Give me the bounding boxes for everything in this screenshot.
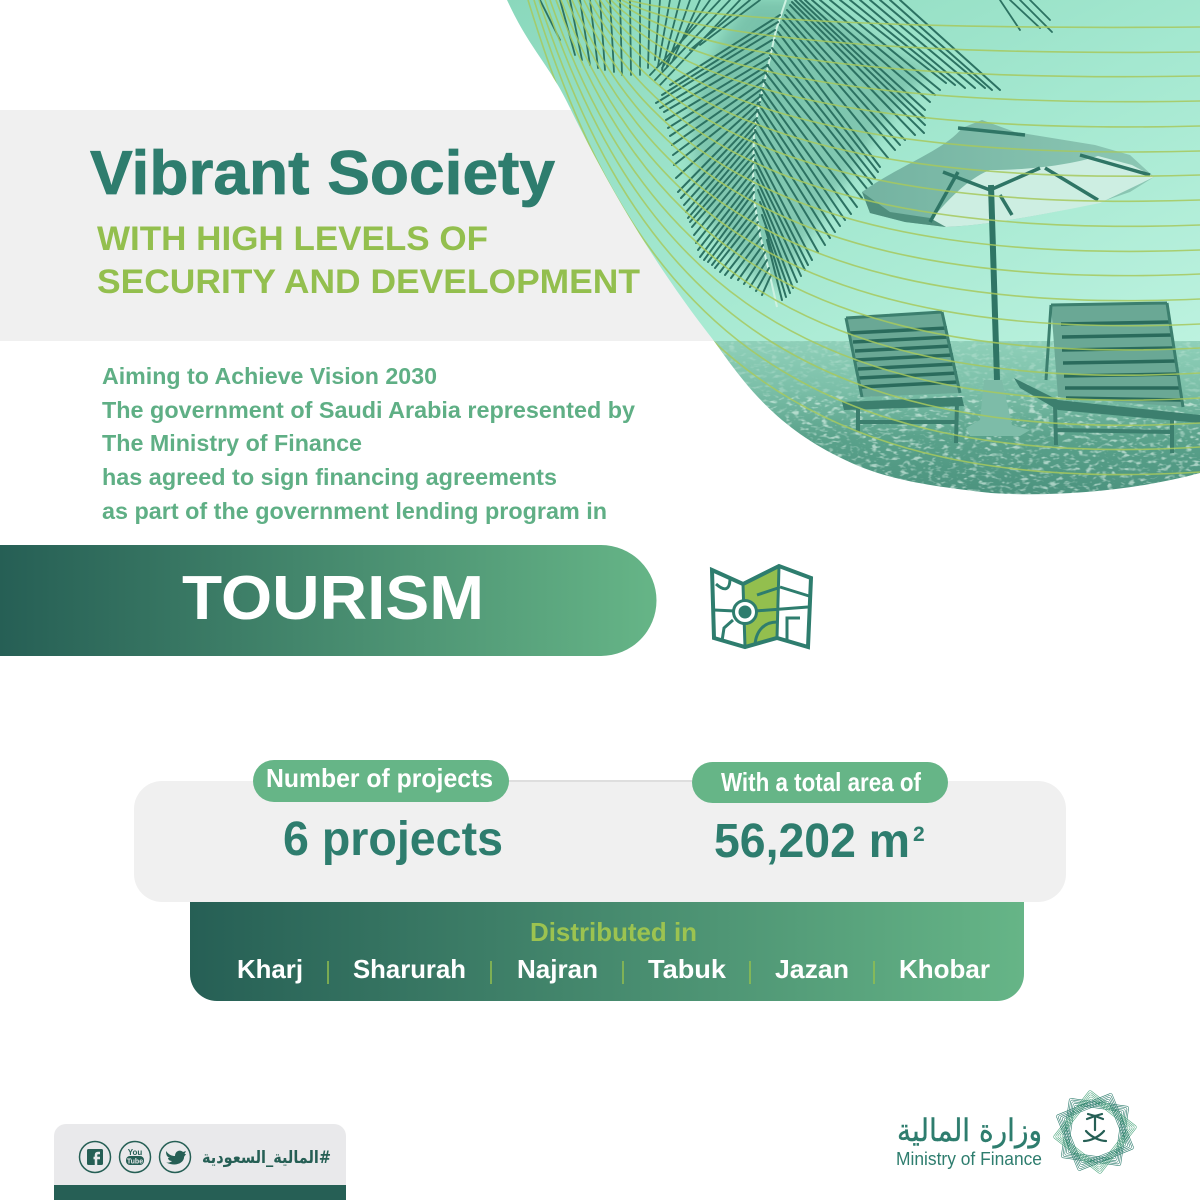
city list: Jazan [775, 954, 849, 984]
heading: distributed in: Distributed in [530, 917, 697, 947]
icon: youtube: You [128, 1148, 142, 1157]
pill: number of projects [253, 760, 509, 802]
icon: folded map [712, 566, 811, 647]
intro text block: The Ministry of Finance [102, 430, 362, 456]
subtitle [97, 220, 640, 301]
panel: statistics [134, 760, 1066, 902]
logo emblem [1053, 1090, 1137, 1174]
intro text block: The government of Saudi Arabia represented by [102, 397, 635, 423]
city list [237, 954, 990, 984]
icon: youtube [120, 1142, 150, 1172]
panel: social media footer [54, 1124, 346, 1200]
sky [500, 0, 1200, 342]
logo: ministry of finance [896, 1090, 1137, 1174]
sector banner: tourism: TOURISM [182, 564, 484, 633]
hashtag: #المالية_السعودية [202, 1148, 331, 1168]
city list: Tabuk [648, 954, 727, 984]
left beach chair [842, 312, 964, 443]
pill: total area: With a total area of [721, 767, 921, 797]
palm fronds [540, 0, 1052, 307]
city list: Najran [517, 954, 598, 984]
city list: Sharurah [353, 954, 466, 984]
intro text block: has agreed to sign financing agreements [102, 464, 557, 490]
stat: projects: 6 projects [283, 813, 503, 866]
right beach chair [1014, 303, 1200, 453]
city list: Kharj [237, 954, 303, 984]
city list: Khobar [899, 954, 990, 984]
curved lime lines [528, 0, 1200, 475]
panel: title background [0, 110, 730, 341]
stat: area: 56,202 m [714, 815, 910, 868]
subtitle: WITH HIGH LEVELS OF [97, 220, 488, 258]
icon: facebook [80, 1142, 110, 1172]
sector banner: tourism [0, 545, 656, 656]
icon: youtube: Tube [127, 1158, 143, 1166]
photo: beach with palm, umbrella and chairs [500, 0, 1200, 501]
pill: total area [692, 762, 948, 803]
stat: area: 2 [913, 823, 925, 846]
panel: distribution of cities [190, 902, 1024, 1001]
logo english name: Ministry of Finance [896, 1149, 1042, 1169]
beach umbrella [862, 120, 1154, 436]
pill: number of projects: Number of projects [266, 763, 493, 793]
intro text block [102, 363, 635, 524]
sea and sand [714, 341, 1200, 494]
intro text block: Aiming to Achieve Vision 2030 [102, 363, 437, 389]
logo arabic name: وزارة المالية [897, 1113, 1042, 1149]
title: Vibrant Society [90, 139, 556, 208]
subtitle: SECURITY AND DEVELOPMENT [97, 263, 640, 301]
intro text block: as part of the government lending program in [102, 498, 607, 524]
icon: twitter [160, 1142, 190, 1172]
